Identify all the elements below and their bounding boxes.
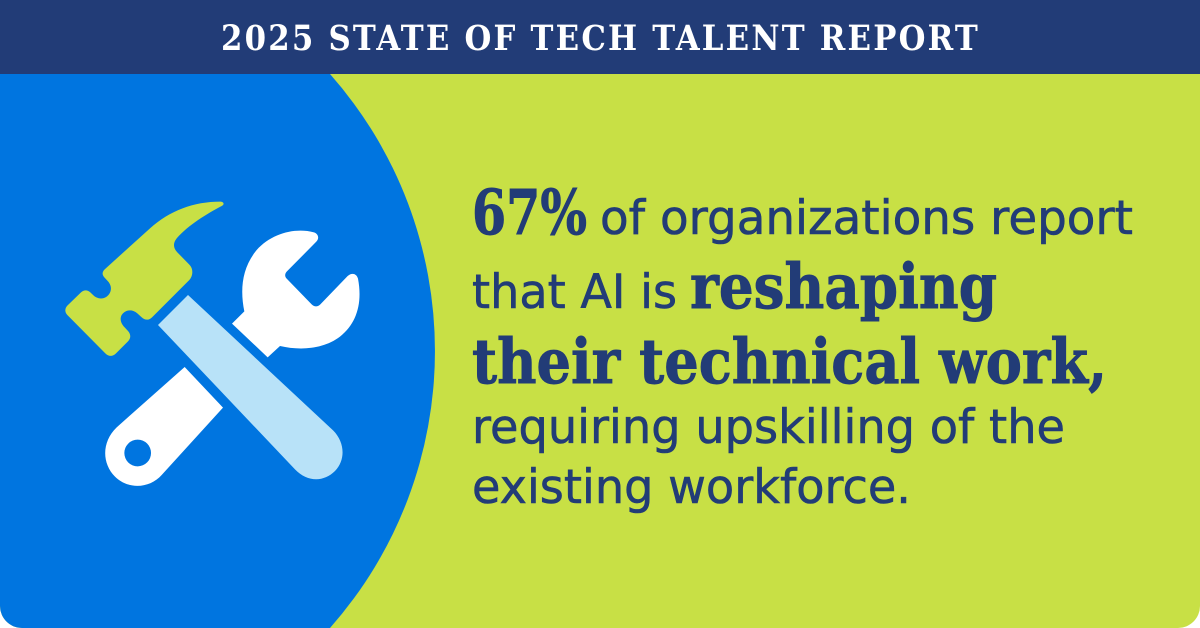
line 1: 67% bbox=[472, 176, 587, 249]
line 2: reshaping bbox=[690, 250, 997, 323]
line 2 bbox=[472, 250, 997, 323]
line 3: their technical work, bbox=[472, 325, 1107, 398]
hammer handle bbox=[158, 295, 343, 479]
header bar bbox=[0, 0, 1200, 74]
panel: blue circle bbox=[0, 74, 435, 628]
line 5: existing workforce. bbox=[472, 460, 911, 515]
statistic text bbox=[472, 176, 1133, 515]
line 1 bbox=[472, 176, 1133, 249]
icon: hammer and wrench bbox=[65, 202, 360, 486]
line 2: that AI is bbox=[472, 265, 677, 320]
hammer head bbox=[65, 202, 224, 356]
title: 2025 STATE OF TECH TALENT REPORT bbox=[221, 18, 980, 59]
wrench handle bbox=[105, 367, 223, 486]
line 1: of organizations report bbox=[600, 191, 1133, 246]
wrench head bbox=[232, 231, 360, 357]
line 4: requiring upskilling of the bbox=[472, 400, 1065, 455]
